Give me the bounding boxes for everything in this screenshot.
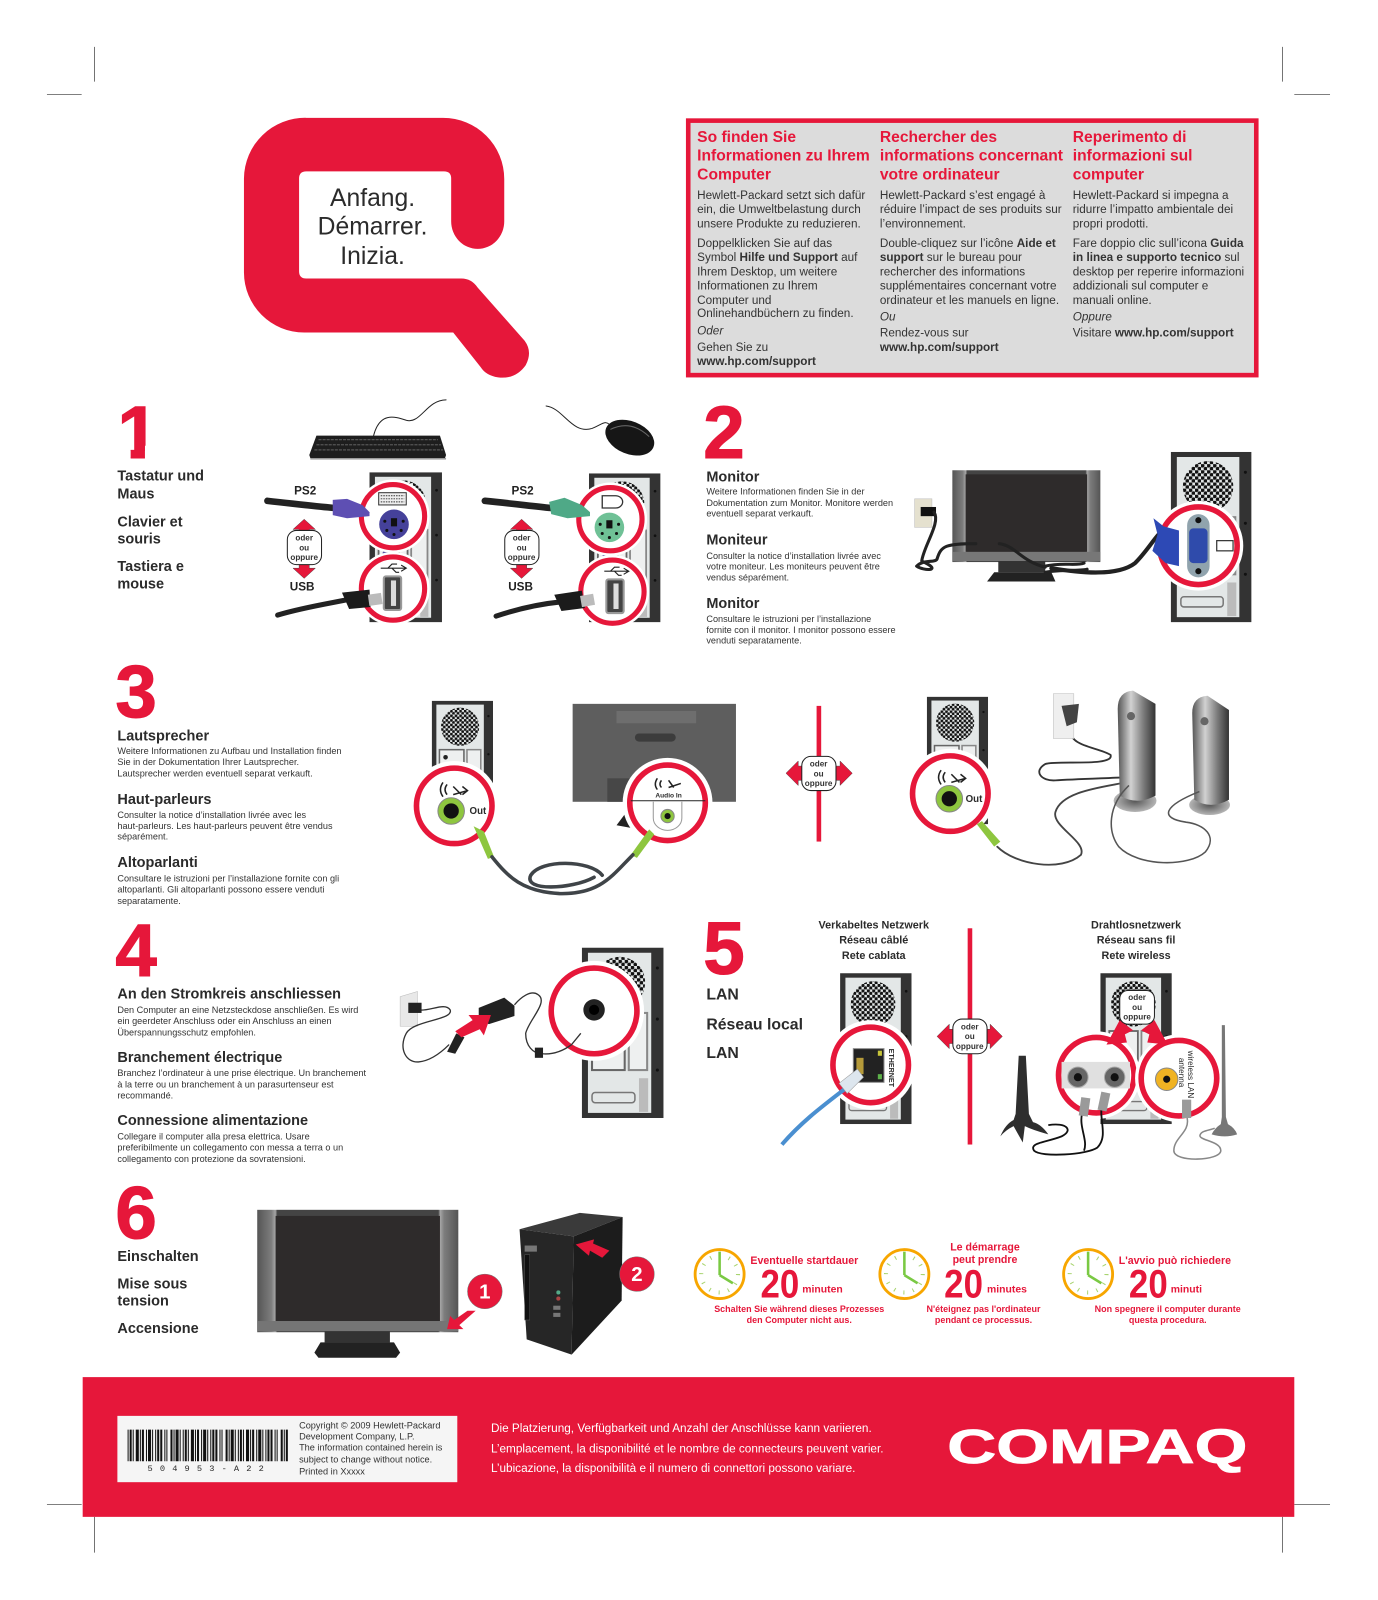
startup notice: german: Eventuelle startdauer [750,1255,858,1267]
step 2 text: venduti separatamente. [706,636,802,646]
step 2: tower with VGA [1153,452,1251,622]
step 3 text: 3 [115,650,157,733]
start text: Inizia. [340,243,405,270]
step 6: badge 2: 2 [631,1264,643,1286]
step 3: right speaker [1189,696,1230,815]
step 3 text: separatamente. [117,896,181,906]
step 6: arrow to tower power [576,1239,609,1258]
french column [879,129,1063,354]
step 1 mouse: or box with arrows: ou [517,543,527,552]
italian column: ridurre l’impatto ambientale dei [1073,203,1233,216]
italian column: informazioni sul [1073,148,1193,165]
step 3: or divider: oppure [805,779,833,788]
step 1: USB label: USB [290,581,315,594]
step 1: PS2 label: PS2 [294,485,317,498]
french column: rechercher des informations [880,265,1025,278]
step 6 text: Mise sous [117,1276,187,1292]
german column [696,129,870,368]
step 2 text: Monitor [706,469,760,485]
startup notice: french: minutes [987,1284,1027,1295]
step 3: left speaker [1114,691,1156,812]
step 5: wireless or box with arrows: ou [1132,1003,1142,1012]
step 3 text: Altoparlanti [117,855,198,871]
start text [318,185,427,270]
callout: line-out: Out [966,794,983,805]
step 3: tower and line out right [905,697,995,839]
copyright text [299,1421,443,1477]
step 1 text: Tastiera e [117,559,184,575]
french column: ordinateur et les manuels en ligne. [880,294,1059,307]
step 1: keyboard connection tower [356,472,442,625]
startup notice: french: pendant ce processus. [935,1315,1032,1325]
step 2 text: fornite con il monitor. I monitor possono essere [706,625,896,635]
callout: USB port [356,552,430,625]
step 4 text: An den Stromkreis anschliessen [117,987,341,1003]
step 6: badge 1: 1 [479,1282,491,1304]
startup notice: german: den Computer nicht aus. [747,1315,852,1325]
step 5 text: LAN [706,1045,739,1062]
german column: Ihrem Desktop, um weitere [697,265,837,278]
barcode label [117,1416,457,1482]
callout: line-out [905,749,995,839]
step 1: or box with arrows: oppure [290,553,318,562]
step 5: ethernet callout: ETHERNET [887,1049,895,1088]
step 3: speaker link cable [1111,785,1210,863]
copyright text: The information contained herein is [299,1443,443,1453]
step 2: monitor front [952,470,1100,581]
step 3: line-out callout [409,761,499,851]
step 1 text: Tastatur und [117,468,204,484]
step 1 text: mouse [117,577,164,593]
wireless network caption [1091,919,1182,962]
step 1 text: souris [117,532,161,548]
step 5: or divider: oppure [956,1042,984,1051]
french column: supplémentaires concernant votre [880,280,1056,293]
step 5 text: LAN [706,987,739,1004]
step 5: blue network cable [782,1069,864,1145]
step 4 text: 4 [115,909,157,992]
step 1 mouse: or box with arrows: oppure [508,553,536,562]
french column: support sur le bureau pour [880,251,1022,264]
step 1: USB cable [278,590,383,615]
step 3 text: Consultare le istruzioni per l’installazione fornite con gli [117,873,339,883]
step 1 text: Maus [117,486,154,502]
step 3 text: altoparlanti. Gli altoparlanti possono essere venduti [117,885,324,895]
step 4: power port callout [544,961,644,1061]
step 4: power adapter and cables [403,993,581,1062]
italian column: propri prodotti. [1073,217,1148,230]
step 2 text: Weitere Informationen finden Sie in der [706,487,864,497]
step 3: audio-in callout [623,758,712,848]
step 3: tower back [432,701,493,828]
wireless network caption: Réseau sans fil [1097,935,1175,947]
step 1: mouse connection tower [574,473,660,628]
step 5: antenna coaxial callout: wireless LAN [1186,1050,1195,1098]
start text: Anfang. [330,185,415,212]
wireless network caption: Rete wireless [1102,950,1171,962]
step 4: tower [582,948,663,1118]
step 5: antenna coaxial callout [1135,1034,1223,1122]
italian column: manuali online. [1073,294,1152,307]
step 5: or divider: oder [961,1022,979,1031]
german column: www.hp.com/support [696,355,816,368]
clock icon [695,1250,744,1299]
step 1: keyboard illustration [309,400,446,460]
italian column: in linea e supporto tecnico sul [1073,251,1240,264]
step 5: wireless or box with arrows [1106,991,1168,1045]
step 6: badge 1 [467,1274,502,1309]
startup notice: german [695,1250,884,1325]
step 1 mouse: or box with arrows [505,519,539,578]
step 4 text [115,909,366,1164]
copyright text: Development Company, L.P. [299,1431,415,1441]
french column: votre ordinateur [880,167,1000,184]
step 4: red arrow [455,1015,491,1037]
german column: Symbol Hilfe und Support auf [697,251,858,264]
step 4 text: ein geerdeter Anschluss oder ein Anschluss an einen [117,1016,332,1026]
step 5: antenna jacks callout [1052,1031,1140,1119]
french column: informations concernant [880,148,1063,165]
italian column: Fare doppio clic sull’icona Guida [1073,237,1244,250]
startup notice: french: 20 [944,1263,983,1307]
step 5: wireless tower [1100,973,1172,1124]
step 6: monitor [257,1210,458,1358]
step 2 text: Dokumentation zum Monitor. Monitore werden [706,498,893,508]
italian column: Hewlett-Packard si impegna a [1073,189,1229,202]
step 4 text: à la terre ou un branchement à un parasurtenseur est [117,1079,334,1089]
step 1 mouse: USB label: USB [508,581,533,594]
step 3 text: séparément. [117,832,168,842]
step 2: VGA cable [1045,518,1179,573]
italian column: Oppure [1073,310,1112,323]
footer banner [83,1377,1294,1517]
step 4 text: Den Computer an eine Netzsteckdose anschließen. Es wird [117,1005,358,1015]
wired network caption: Verkabeltes Netzwerk [819,919,930,931]
step 1: mouse illustration [546,406,660,462]
step 2 text: Consultare le istruzioni per l’installazione [706,614,871,624]
clock icon [880,1250,929,1299]
step 6 text: Einschalten [117,1249,199,1265]
step 2 text: eventuell separat verkauft. [706,509,813,519]
startup notice: french [880,1242,1041,1325]
compaq logo: COMPAQ [947,1421,1247,1474]
french column: Hewlett-Packard s’est engagé à [880,189,1046,202]
connector note [491,1422,884,1475]
step 1 text: 1 [117,391,159,474]
step 2 text: Consulter la notice d’installation livrée avec [706,551,881,561]
german column: ein, die Umweltbelastung durch [697,203,861,216]
step 4 text: Branchez l’ordinateur à une prise électrique. Un branchement [117,1068,366,1078]
step 3: speaker cables [977,728,1126,865]
step 3 text: Lautsprecher [117,729,209,745]
panel: finding information [688,121,1256,375]
german column: Onlinehandbüchern zu finden. [697,307,854,320]
french column: Ou [880,310,896,323]
italian column: computer [1073,167,1144,184]
german column: Doppelklicken Sie auf das [697,237,832,250]
startup notice: german: minuten [802,1284,843,1295]
step 5: black antenna [1000,1056,1110,1155]
step 1 mouse: USB cable [496,591,595,616]
step 1: or box with arrows: ou [299,543,309,552]
step 3: monitor back with stand [573,704,736,828]
step 4 text: Collegare il computer alla presa elettrica. Usare [117,1131,310,1141]
clock icon [1064,1250,1113,1299]
italian column [1073,129,1244,340]
logo: Q with start text [244,118,529,378]
step 1 mouse: green PS2 cable [485,498,590,518]
connector note: L’ubicazione, la disponibilità e il numero di connettori possono variare. [491,1462,855,1475]
startup notice: italian: Non spegnere il computer durante [1095,1304,1241,1314]
german column: Gehen Sie zu [697,341,768,354]
step 3: or divider: ou [814,769,824,778]
step 6: desktop tower [520,1213,623,1355]
german column: Computer [697,167,771,184]
italian column: desktop per reperire informazioni [1073,265,1244,278]
german column: Oder [697,325,724,338]
step 2 text: Moniteur [706,533,768,549]
step 5: or divider: ou [965,1032,975,1041]
italian column: Visitare www.hp.com/support [1073,327,1234,340]
german column: Computer und [697,294,771,307]
german column: unsere Produkte zu reduzieren. [697,217,861,230]
wired network caption: Réseau câblé [839,935,908,947]
german column: Informationen zu Ihrem [697,280,818,293]
step 1: purple PS2 cable [267,499,370,518]
step 5: wired tower [840,973,912,1124]
german column: Informationen zu Ihrem [697,148,870,165]
german column: So finden Sie [697,129,796,146]
step 3 text: Haut-parleurs [117,792,211,808]
startup notice: german: 20 [760,1263,799,1307]
sound symbol [440,782,467,797]
step 4 text: recommandé. [117,1091,173,1101]
step 3 text: Sie in der Dokumentation Ihrer Lautsprecher. [117,757,299,767]
italian column: addizionali sul computer e [1073,280,1208,293]
step 6 text [115,1171,199,1337]
wired network caption: Rete cablata [842,950,907,962]
french column: Double-cliquez sur l’icône Aide et [880,237,1056,250]
wireless network caption: Drahtlosnetzwerk [1091,919,1182,931]
french column: Rechercher des [880,129,997,146]
startup notice: italian: questa procedura. [1129,1315,1207,1325]
callout: VGA port [1153,501,1243,591]
step 3 text [115,650,342,906]
italian column: Reperimento di [1073,129,1186,146]
step 3: audio-in callout: Audio In [655,793,682,800]
step 1 mouse: PS2 label: PS2 [512,485,534,498]
startup notice: french: Le démarrage [950,1242,1020,1254]
step 3: wall plug [1053,694,1079,739]
step 5: wireless or box with arrows: oder [1128,993,1147,1002]
connector note: Die Platzierung, Verfügbarkeit und Anzahl der Anschlüsse kann variieren. [491,1422,872,1435]
step 5 text: 5 [703,907,745,990]
german column: Hewlett-Packard setzt sich dafür [697,189,865,202]
step 2 text: vendus séparément. [706,572,789,582]
french column: www.hp.com/support [879,341,999,354]
startup notice: italian: 20 [1129,1263,1168,1307]
step 3 text: haut-parleurs. Les haut-parleurs peuvent être vendus [117,821,333,831]
copyright text: Printed in Xxxxx [299,1467,365,1477]
step 6: arrow to monitor power [447,1311,476,1329]
callout: PS2 mouse port [574,482,647,556]
step 4 text: Branchement électrique [117,1050,282,1066]
step 1 text [118,406,203,588]
step 5: ethernet callout [826,1020,916,1110]
barcode [128,1430,288,1461]
copyright text: Copyright © 2009 Hewlett-Packard [299,1421,440,1431]
french column: Rendez-vous sur [880,327,969,340]
step 3: line-out callout: Out [470,806,487,817]
step 5 text: Réseau local [706,1016,803,1033]
step 4 text: collegamento con protezione da sovratensioni. [117,1154,306,1164]
step 4 text: preferibilmente un collegamento con messa a terra o un [117,1143,343,1153]
step 3 text: Lautsprecher werden eventuell separat verkauft. [117,768,313,778]
startup notice: italian: minuti [1171,1284,1202,1295]
step 1 text: Clavier et [117,514,183,530]
step 6 text: tension [117,1294,169,1310]
start text: Démarrer. [318,214,427,241]
connector note: L’emplacement, la disponibilité et le nombre de connecteurs peuvent varier. [491,1443,884,1456]
french column: réduire l’impact de ses produits sur [880,203,1062,216]
step 1: or box with arrows [287,519,322,578]
step 2 text [703,391,896,646]
step 6: badge 2 [620,1257,654,1291]
step 3: or divider [786,706,852,842]
startup notice: italian: L'avvio può richiedere [1119,1255,1231,1267]
step 4 text: Connessione alimentazione [117,1113,308,1129]
step 1: or box with arrows: oder [295,534,314,543]
step 5: grey antenna [1174,1025,1237,1159]
step 6 text: 6 [115,1171,157,1254]
callout: USB port [576,555,649,628]
startup notice: italian [1064,1250,1241,1325]
step 3: audio cable [474,826,654,894]
step 5 text [703,907,803,1062]
step 5: or divider [937,928,1002,1145]
french column: l’environnement. [880,217,966,230]
step 3 text: Weitere Informationen zu Aufbau und Installation finden [117,746,342,756]
wired network caption [819,919,930,962]
barcode digits: 504953-A22 [148,1464,271,1474]
step 5: antenna coaxial callout: antenna [1177,1058,1186,1088]
startup notice: french: N'éteignez pas l'ordinateur [927,1304,1041,1314]
step 2 text: 2 [703,391,745,474]
step 2: wall outlet and power cable [915,499,1045,569]
step 2 text: votre moniteur. Les moniteurs peuvent être [706,562,880,572]
step 4 text: Überspannungsschutz empfohlen. [117,1027,256,1037]
step 3 text: Consulter la notice d’installation livrée avec les [117,810,307,820]
copyright text: subject to change without notice. [299,1454,432,1464]
step 3: or divider: oder [810,760,828,769]
step 1 mouse: or box with arrows: oder [513,534,531,543]
step 6 text: Accensione [117,1321,199,1337]
step 4: outlet [400,992,417,1026]
step 5: wireless or box with arrows: oppure [1123,1013,1151,1022]
callout: PS2 keyboard port [356,479,430,553]
startup notice: french: peut prendre [953,1254,1018,1266]
startup notice: german: Schalten Sie während dieses Prozesses [714,1304,884,1314]
step 2 text: Monitor [706,596,760,612]
